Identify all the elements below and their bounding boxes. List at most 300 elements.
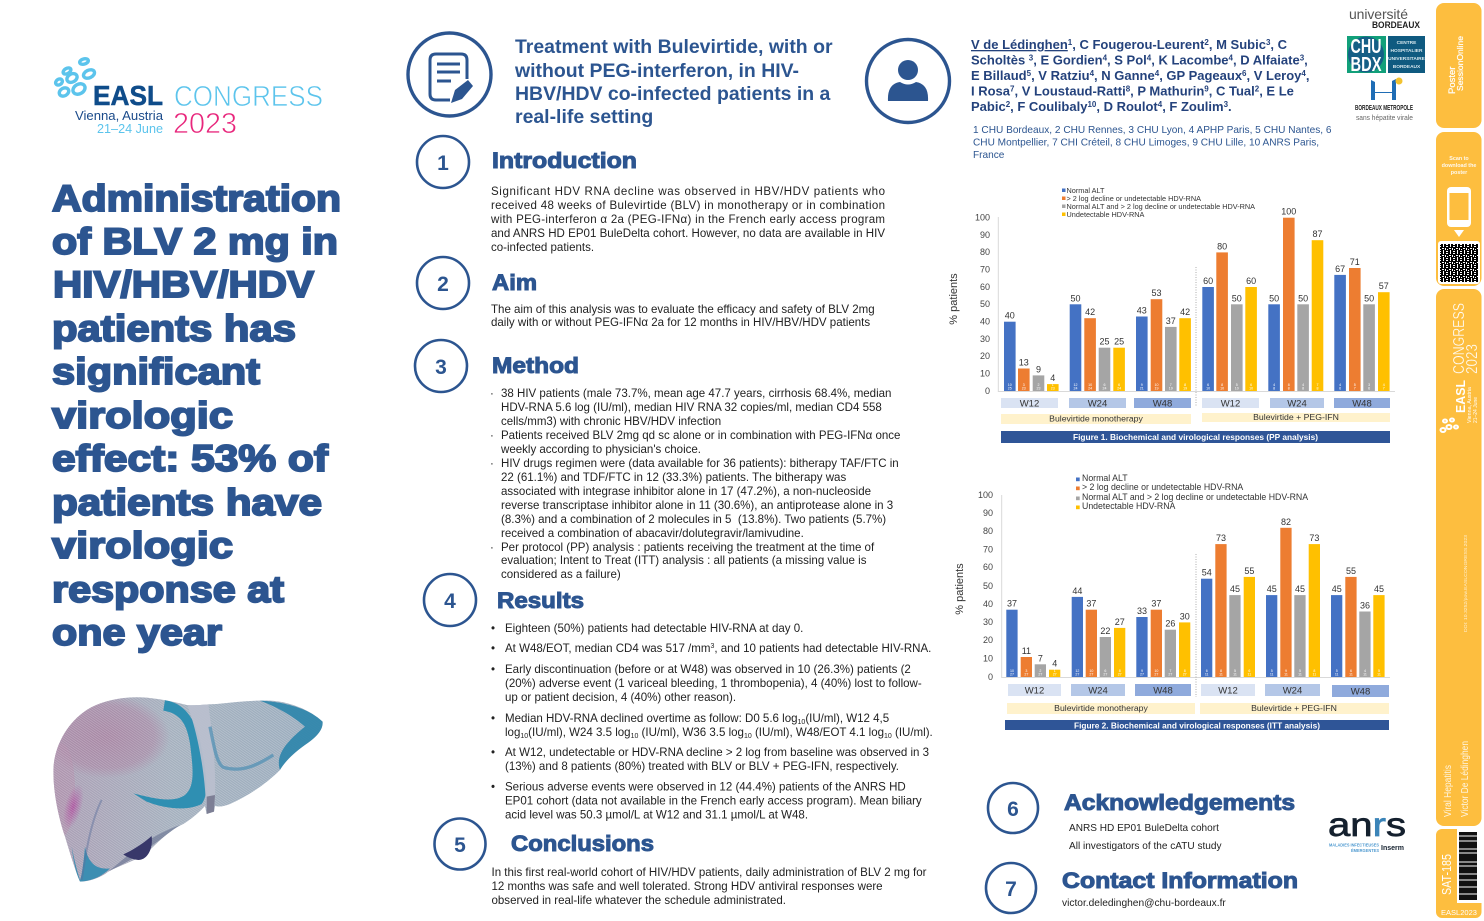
section 5: conclusions: [434, 818, 927, 907]
sidebar: EASL congress info: Vienna, Austria: [1467, 386, 1473, 423]
bars: monotherapy W48: 42: [1180, 307, 1190, 317]
bars: combination W12: 54: [1202, 568, 1212, 578]
bars: combination W24: 50: [1298, 293, 1308, 303]
text: results bullets: Serious adverse events were observed in 12 (44.4%) patients of the ANRS HD: [505, 782, 906, 794]
logo: EASL Congress 2023: Vienna, Austria: [75, 109, 163, 123]
legend: figure 1: Normal ALT: [1066, 186, 1105, 195]
bars: monotherapy W24: [1072, 586, 1125, 677]
bars: monotherapy W12: 11: [1022, 646, 1031, 656]
bar fractions: figure 1: 5: [1354, 383, 1356, 387]
bars: monotherapy W48: 37: [1151, 599, 1161, 609]
bar fractions: figure 1: 10: [1008, 383, 1012, 387]
y axis: figure 1: % patients: [948, 273, 960, 325]
bars: combination W24: [1268, 207, 1323, 391]
bar fractions: figure 1: 19: [1169, 387, 1173, 391]
y axis: figure 2: 70: [983, 544, 993, 554]
text: acknowledgements body: All investigators of the cATU study: [1069, 841, 1222, 852]
bar fractions: figure 2: 27: [1140, 673, 1144, 677]
bar fractions: figure 1: 6: [1118, 383, 1120, 387]
section 6: acknowledgements: Acknowledgements: [1064, 790, 1295, 815]
bars: monotherapy W12: 4: [1052, 659, 1057, 669]
bar fractions: figure 2: 27: [1183, 673, 1187, 677]
bar fractions: figure 2: 11: [1298, 673, 1302, 677]
bars: combination W24: 82: [1281, 517, 1291, 527]
text: results bullets: •: [491, 643, 495, 655]
bar fractions: figure 2: 2: [1039, 669, 1041, 673]
sidebar: EASL congress info: Viral Hepatitis: [1443, 765, 1454, 817]
bar fractions: figure 2: [1010, 669, 1381, 677]
bars: combination W48: 67: [1335, 264, 1345, 274]
text: affiliations: [973, 125, 1332, 161]
text: results bullets: Early discontinuation (before or at W48) was observed in 10 (26.3%) patients (2: [505, 664, 911, 676]
text: acknowledgements body: ANRS HD EP01 BuleDelta cohort: [1069, 823, 1219, 834]
text: introduction body: [490, 186, 885, 254]
bar fractions: figure 1: 6: [1104, 383, 1106, 387]
illustration: liver: [53, 697, 323, 882]
text: acknowledgements body: [1069, 823, 1222, 852]
sidebar: EASL congress info: 2023: [1464, 344, 1481, 374]
y axis: figure 1: [948, 212, 1395, 407]
caption: figure 2: Figure 2. Biochemical and virological responses (ITT analysis): [1074, 720, 1320, 730]
bar fractions: figure 2: 27: [1024, 673, 1028, 677]
panel: authors: E Billaud5, V Ratziu4, N Ganne4, GP Pageaux6, V Leroy4,: [971, 68, 1310, 83]
week labels: figure 2: [1008, 684, 1389, 698]
bar fractions: figure 2: 8: [1220, 669, 1222, 673]
text: method bullets: ·: [490, 542, 494, 554]
logo: CHU BDX: [1347, 36, 1426, 76]
bar fractions: figure 1: 4: [1302, 383, 1304, 387]
logo: Bordeaux Metropole: sans hépatite virale: [1356, 115, 1413, 122]
bar fractions: figure 2: 6: [1350, 669, 1352, 673]
week labels: figure 1: W12: [1221, 398, 1240, 410]
bar fractions: figure 1: 10: [1088, 383, 1092, 387]
sidebar: poster number and barcode: [1436, 829, 1482, 918]
sidebar: scan to download: download the: [1442, 163, 1476, 169]
bars: monotherapy W12: 9: [1036, 364, 1041, 374]
bars: combination W48: 45: [1374, 584, 1384, 594]
bar fractions: figure 2: 11: [1248, 673, 1251, 677]
bar fractions: figure 1: 6: [1339, 387, 1341, 391]
text: conclusions body: In this first real-world cohort of HIV/HDV patients, daily administration of BLV 2 mg for: [492, 867, 927, 879]
bar fractions: figure 1: 24: [1074, 387, 1078, 391]
bar fractions: figure 2: 11: [1313, 673, 1316, 677]
bar fractions: figure 1: 19: [1183, 387, 1187, 391]
bars: monotherapy W12: 37: [1007, 599, 1017, 609]
bars: combination W48: 71: [1350, 257, 1360, 267]
icon: person: [866, 40, 950, 122]
y axis: figure 2: 50: [983, 581, 993, 591]
text: method bullets: (8.3%) and a combination of 2 molecules in 5 (13.8%). Two patients (5.7%): [501, 514, 886, 526]
bars: monotherapy W12: 7: [1038, 653, 1043, 663]
text: conclusions body: 12 months was safe and well tolerated. Strong HDV antiviral responses were: [492, 881, 883, 893]
title: main conclusion: virologic: [52, 395, 233, 436]
legend: figure 1: [1062, 186, 1255, 219]
y axis: figure 2: 10: [983, 654, 993, 664]
sidebar: scan to download: [1436, 132, 1482, 286]
text: results bullets: •: [491, 664, 495, 676]
y axis: figure 1: 70: [980, 264, 990, 274]
week labels: figure 2: W24: [1283, 686, 1302, 696]
section 1: introduction: [417, 136, 885, 254]
bars: combination W12: 55: [1244, 566, 1254, 576]
text: results bullets: up or patient decision, 4 (40%) other reason).: [505, 692, 736, 704]
bar fractions: figure 1: 4: [1339, 383, 1341, 387]
bars: monotherapy W24: 22: [1100, 626, 1110, 636]
sidebar: scan to download: Scan to: [1449, 156, 1469, 162]
caption: figure 1: Figure 1. Biochemical and virological responses (PP analysis): [1073, 432, 1318, 442]
text: method bullets: considered as a failure): [501, 569, 621, 581]
logo: Bordeaux Metropole: BORDEAUX METROPOLE: [1355, 105, 1413, 112]
title: main conclusion: significant: [52, 351, 260, 392]
panel: authors: Pabic2, F Coulibaly10, D Roulot4, F Zoulim3.: [971, 99, 1232, 114]
sidebar: scan to download: poster: [1451, 170, 1468, 176]
bar fractions: figure 1: 10: [1220, 387, 1224, 391]
legend: figure 1: Normal ALT and > 2 log decline or undetectable HDV-RNA: [1066, 202, 1255, 211]
y axis: figure 1: 100: [975, 212, 990, 222]
bars: combination W12: 60: [1246, 276, 1256, 286]
y axis: figure 1: 60: [980, 282, 990, 292]
bar fractions: figure 2: 11: [1284, 673, 1288, 677]
text: results bullets: •: [491, 747, 495, 759]
bars: combination W12: 45: [1230, 584, 1240, 594]
bar fractions: figure 1: 8: [1302, 387, 1304, 391]
text: introduction body: and ANRS HD EP01 BuleDelta cohort. However, no data are available in HIV: [491, 228, 885, 240]
bar fractions: figure 1: 9: [1141, 383, 1143, 387]
legend: figure 1: Undetectable HDV-RNA: [1066, 210, 1145, 219]
y axis: figure 2: 20: [983, 635, 993, 645]
bar fractions: figure 1: 8: [1316, 387, 1318, 391]
bar fractions: figure 1: 8: [1273, 387, 1275, 391]
bar fractions: figure 2: 11: [1205, 673, 1209, 677]
text: method bullets: reverse transcriptase inhibitor alone in 11 (30.6%), an antiprotease alone in 3: [501, 500, 893, 512]
y axis: figure 2: 60: [983, 562, 993, 572]
bar fractions: figure 2: 6: [1248, 669, 1250, 673]
legend: figure 1: > 2 log decline or undetectable HDV-RNA: [1066, 194, 1201, 203]
text: method bullets: ·: [490, 458, 494, 470]
icon: small hexagons: [1440, 418, 1458, 432]
bar fractions: figure 2: 11: [1270, 673, 1274, 677]
bars: combination W24: 87: [1312, 229, 1323, 239]
bars: combination W24: 100: [1281, 207, 1296, 217]
bar fractions: figure 2: 9: [1285, 669, 1287, 673]
text: conclusions body: observed in real-life whatever the schedule administrated.: [492, 895, 786, 907]
bar fractions: figure 1: 25: [1008, 387, 1012, 391]
bars: combination W24: 50: [1269, 293, 1279, 303]
group labels: figure 2: Bulevirtide + PEG-IFN: [1251, 703, 1337, 713]
bars: combination W12: [1201, 533, 1255, 677]
bars: combination W48: 57: [1379, 281, 1389, 291]
bar fractions: figure 1: 23: [1022, 387, 1026, 391]
y axis: figure 1: 40: [980, 316, 990, 326]
bars: combination W48: [1331, 566, 1385, 677]
bars: combination W12: 60: [1203, 276, 1213, 286]
logo: ANRS Inserm: ÉMERGENTES: [1351, 848, 1379, 853]
bar fractions: figure 1: 10: [1249, 387, 1253, 391]
heading: poster title: Treatment with Bulevirtide, with or: [515, 36, 833, 58]
bars: monotherapy W48: [1136, 288, 1191, 391]
week labels: figure 1: [1001, 398, 1390, 410]
bar fractions: figure 1: 5: [1236, 383, 1238, 387]
bar fractions: figure 2: 5: [1271, 669, 1273, 673]
panel: authors: Scholtès 3, E Gordien4, S Pol4, K Lacombe4, D Alfaiate3,: [971, 52, 1308, 68]
text: results bullets: Median HDV-RNA declined overtime as follow: D0 5.6 log10(IU/ml), W12 4,5: [505, 713, 889, 726]
section 4: results: [424, 574, 933, 822]
legend: figure 2: Normal ALT: [1082, 473, 1128, 483]
bars: combination W48: 45: [1332, 584, 1342, 594]
bar fractions: figure 1: 24: [1088, 387, 1092, 391]
bar fractions: figure 2: 7: [1169, 669, 1171, 673]
text: affiliations: France: [973, 150, 1005, 161]
chart: Figure 1 PP analysis: [948, 186, 1395, 443]
bar fractions: figure 1: 4: [1273, 383, 1275, 387]
bar fractions: figure 1: 8: [1288, 387, 1290, 391]
bars: combination W48: [1334, 257, 1390, 391]
bar fractions: figure 2: 5: [1378, 669, 1380, 673]
text: results bullets: At W48/EOT, median CD4 was 517 /mm3, and 10 patients had detectable HIV-RNA.: [505, 643, 931, 655]
logo: ANRS Inserm: anrs: [1328, 806, 1406, 843]
y axis: figure 1: 80: [980, 247, 990, 257]
group labels: figure 1: Bulevirtide monotherapy: [1049, 414, 1143, 424]
week labels: figure 1: W24: [1088, 398, 1107, 410]
bar fractions: figure 1: 19: [1154, 387, 1158, 391]
bars: monotherapy W24: 25: [1099, 337, 1110, 347]
bar fractions: figure 2: 1: [1054, 669, 1056, 673]
bar fractions: figure 1: 7: [1383, 387, 1385, 391]
group labels: figure 2: Bulevirtide monotherapy: [1054, 703, 1148, 713]
text: method bullets: ·: [490, 430, 494, 442]
section 2: aim: Aim: [492, 270, 537, 295]
section 3: method: Method: [492, 353, 579, 378]
text: results bullets: Eighteen (50%) patients had detectable HIV-RNA at day 0.: [505, 623, 803, 635]
bar fractions: figure 1: 1: [1052, 383, 1054, 387]
section 4: results: Results: [497, 588, 584, 613]
sidebar: poster number and barcode: EASL2023: [1441, 908, 1477, 917]
bar fractions: figure 1: 23: [1036, 387, 1040, 391]
legend: figure 2: > 2 log decline or undetectable HDV-RNA: [1082, 482, 1243, 492]
bar fractions: figure 2: 10: [1010, 669, 1014, 673]
text: aim body: [491, 304, 875, 329]
text: results bullets: log10(IU/ml), W24 3.5 log10 (IU/ml), W36 3.5 log10 (IU/ml), W48/EOT 4.1 log10 (IU/ml).: [505, 727, 933, 740]
bars: combination W48: 55: [1346, 566, 1356, 576]
logo: Bordeaux Metropole: [1355, 78, 1413, 122]
bars: monotherapy W48: 53: [1151, 288, 1162, 298]
logo: EASL Congress 2023: EASL: [93, 80, 163, 111]
text: method bullets: ·: [490, 388, 494, 400]
bars: combination W12: 80: [1217, 241, 1227, 251]
bar fractions: figure 1: 6: [1250, 383, 1252, 387]
sidebar: EASL congress info: [1436, 289, 1482, 826]
bar fractions: figure 1: 10: [1235, 387, 1239, 391]
bars: combination W12: [1202, 241, 1257, 391]
bar fractions: figure 1: 21: [1140, 387, 1144, 391]
logo: CHU BDX: HOSPITALIER: [1391, 48, 1423, 54]
bar fractions: figure 2: 5: [1336, 669, 1338, 673]
week labels: figure 2: W48: [1351, 686, 1370, 698]
bar fractions: figure 2: 27: [1010, 673, 1014, 677]
bar fractions: figure 2: 4: [1364, 669, 1366, 673]
bar fractions: figure 1: 10: [1206, 387, 1210, 391]
sidebar: EASL congress info: DOI: 10.3252/pow.EASLCONGRESS.2023: [1463, 534, 1468, 632]
section 3: method: 3: [435, 356, 447, 379]
bar fractions: figure 1: 8: [1184, 383, 1186, 387]
text: method bullets: 38 HIV patients (male 73.7%, mean age 47.7 years, cirrhosis 68.4%, median: [501, 388, 891, 400]
legend: figure 2: [1076, 473, 1308, 511]
caption: figure 2: [1005, 720, 1389, 730]
bar fractions: figure 2: 11: [1363, 673, 1367, 677]
text: method bullets: 22 (61.1%) and TDF/FTC in 12 (33.3%) patients. The bitherapy was: [501, 472, 846, 484]
text: method bullets: HIV drugs regimen were (data available for 36 patients): bitherapy TAF/FTC in: [501, 458, 899, 470]
title: main conclusion: patients have: [52, 482, 322, 523]
text: affiliations: 1 CHU Bordeaux, 2 CHU Rennes, 3 CHU Lyon, 4 APHP Paris, 5 CHU Nantes, 6: [973, 125, 1332, 136]
bar fractions: figure 2: 27: [1075, 673, 1079, 677]
icon: document and pencil: [408, 33, 491, 116]
week labels: figure 2: W12: [1025, 686, 1044, 696]
group labels: figure 2: [1007, 703, 1389, 714]
week labels: figure 1: W48: [1352, 398, 1372, 410]
bars: monotherapy W12: [1004, 311, 1059, 391]
chart: Figure 2 ITT analysis: [954, 473, 1390, 730]
bar fractions: figure 1: 24: [1102, 387, 1106, 391]
text: method bullets: weekly according to physician's choice.: [500, 444, 701, 456]
bar fractions: figure 1: 7: [1170, 383, 1172, 387]
bars: monotherapy W12: 40: [1005, 311, 1015, 321]
bar fractions: figure 1: 4: [1383, 383, 1385, 387]
bar fractions: figure 1: 23: [1051, 387, 1055, 391]
bar fractions: figure 2: 5: [1299, 669, 1301, 673]
barcode: [1457, 829, 1482, 903]
bar fractions: figure 2: 8: [1119, 669, 1121, 673]
group labels: figure 1: Bulevirtide + PEG-IFN: [1253, 412, 1339, 422]
section 7: contact information: 7: [1005, 878, 1017, 901]
text: introduction body: with PEG-interferon α 2a (PEG-IFNα) in the French early access program: [490, 214, 885, 226]
logo: CHU BDX: CENTRE: [1397, 40, 1417, 46]
text: method bullets: [490, 388, 900, 581]
week labels: figure 1: W48: [1153, 398, 1172, 410]
bar fractions: figure 1: [1008, 383, 1385, 391]
bar fractions: figure 1: 2: [1038, 383, 1040, 387]
text: method bullets: evaluation; Intent to Treat (ITT) analysis : all patients (a missing value is: [501, 555, 867, 567]
text: results bullets: At W12, undetectable or HDV-RNA decline > 2 log from baseline was observed in 3: [505, 747, 929, 759]
text: results bullets: •: [491, 782, 495, 794]
section 5: conclusions: Conclusions: [511, 831, 654, 856]
bar fractions: figure 2: 6: [1104, 669, 1106, 673]
logo: CHU BDX: BDX: [1350, 54, 1382, 76]
logo: ANRS Inserm: Inserm: [1381, 845, 1404, 852]
legend: figure 2: Undetectable HDV-RNA: [1082, 501, 1176, 511]
bars: combination W24: 45: [1267, 584, 1277, 594]
bars: combination W24: 73: [1309, 533, 1319, 543]
section 3: method: [415, 340, 900, 581]
logo: EASL Congress 2023: CONGRESS: [174, 81, 323, 113]
caption: figure 1: [1001, 431, 1390, 443]
bars: combination W24: 45: [1295, 584, 1305, 594]
bar fractions: figure 2: 27: [1103, 673, 1107, 677]
bars: monotherapy W48: 43: [1137, 306, 1147, 316]
text: results bullets: acid level was 50.3 µmol/L at W12 and 31.1 µmol/L at W48.: [505, 810, 808, 822]
section 7: contact information: Contact Information: [1062, 868, 1298, 893]
text: introduction body: Significant HDV RNA decline was observed in HBV/HDV patients who: [491, 186, 885, 198]
week labels: figure 1: W12: [1020, 398, 1039, 410]
bars: monotherapy W48: [1136, 599, 1190, 677]
text: method bullets: HDV-RNA 5.6 log (IU/ml), median HIV RNA 32 copies/ml, median CD4 558: [501, 402, 882, 414]
bars: monotherapy W48: 30: [1180, 611, 1190, 621]
text: aim body: daily with or without PEG-IFNα 2a for 12 months in HIV/HBV/HDV patients: [491, 317, 870, 329]
y axis: figure 1: 0: [985, 386, 990, 396]
bar fractions: figure 2: 11: [1219, 673, 1223, 677]
bar fractions: figure 2: 6: [1206, 669, 1208, 673]
sidebar: EASL congress info: Victor De Lédinghen: [1460, 741, 1471, 817]
week labels: figure 2: W24: [1088, 686, 1108, 696]
panel: authors: I Rosa7, V Loustaud-Ratti8, P Mathurin9, C Tual2, E Le: [971, 84, 1294, 98]
bars: combination W24: [1266, 517, 1320, 677]
sidebar: poster session online: SessionOnline: [1455, 36, 1465, 91]
bar fractions: figure 2: 5: [1234, 669, 1236, 673]
text: results bullets: (20%) adverse event (1 variceal bleeding, 1 thrombopenia), 4 (40%) lost to follow-: [505, 678, 922, 690]
week labels: figure 2: W48: [1153, 686, 1173, 696]
bars: combination W12: 50: [1232, 293, 1242, 303]
QR code: [1438, 241, 1480, 284]
bar fractions: figure 1: 12: [1074, 383, 1078, 387]
title: main conclusion: effect: 53% of: [52, 438, 329, 479]
bar fractions: figure 1: 3: [1368, 383, 1370, 387]
section 5: conclusions: 5: [454, 834, 466, 857]
y axis: figure 1: 10: [980, 368, 990, 378]
y axis: figure 2: % patients: [954, 563, 966, 615]
week labels: figure 1: W24: [1287, 398, 1307, 410]
bars: combination W12: 73: [1216, 533, 1226, 543]
bar fractions: figure 2: 10: [1089, 669, 1093, 673]
sidebar: poster number and barcode: SAT-185: [1439, 854, 1454, 895]
y axis: figure 1: 50: [980, 299, 990, 309]
section 1: introduction: 1: [437, 152, 449, 175]
text: method bullets: associated with integrase inhibitor alone in 17 (47.2%), a non-nucleoside: [501, 486, 871, 498]
bar fractions: figure 1: 7: [1316, 383, 1318, 387]
logo: EASL Congress 2023: 2023: [173, 108, 237, 140]
text: aim body: The aim of this analysis was to evaluate the efficacy and safety of BLV 2mg: [491, 304, 875, 316]
y axis: figure 2: 40: [983, 599, 993, 609]
bar fractions: figure 1: 6: [1207, 383, 1209, 387]
section 1: introduction: Introduction: [492, 148, 637, 173]
heading: poster title: without PEG-interferon, in HIV-: [514, 60, 799, 82]
bar fractions: figure 2: 8: [1313, 669, 1315, 673]
logo: EASL Congress 2023: 21–24 June: [97, 122, 163, 136]
heading: poster title: real-life setting: [515, 106, 653, 128]
y axis: figure 1: 90: [980, 230, 990, 240]
heading: poster title: [514, 36, 833, 128]
text: results bullets: EP01 cohort (data not available in the French early access program). Mean biliary: [505, 796, 922, 808]
logo: CHU BDX: UNIVERSITAIRE: [1388, 56, 1426, 62]
logo: CHU BDX: CHU: [1350, 36, 1382, 58]
logo: Université de Bordeaux: BORDEAUX: [1372, 20, 1420, 30]
logo: ANRS Inserm: MALADIES INFECTIEUSES: [1329, 842, 1379, 848]
bar fractions: figure 2: 27: [1118, 673, 1122, 677]
panel: authors: V de Lédinghen1, C Fougerou-Leurent2, M Subic3, C: [971, 37, 1288, 52]
bar fractions: figure 2: 8: [1184, 669, 1186, 673]
sidebar: EASL congress info: CONGRESS: [1451, 303, 1468, 374]
y axis: figure 1: 20: [980, 351, 990, 361]
bars: monotherapy W24: 42: [1085, 307, 1095, 317]
y axis: figure 2: [954, 490, 1390, 697]
bar fractions: figure 2: 3: [1025, 669, 1027, 673]
title: main conclusion: one year: [52, 612, 222, 653]
logo: Université de Bordeaux: [1349, 6, 1420, 30]
section 6: acknowledgements: 6: [1007, 798, 1019, 821]
sidebar: poster session online: Poster: [1447, 67, 1458, 94]
bar fractions: figure 2: 27: [1168, 673, 1172, 677]
heading: poster title: HBV/HDV co-infected patients in a: [515, 83, 831, 105]
logo: CHU BDX: BORDEAUX: [1393, 64, 1421, 70]
bar fractions: figure 1: 8: [1288, 383, 1290, 387]
